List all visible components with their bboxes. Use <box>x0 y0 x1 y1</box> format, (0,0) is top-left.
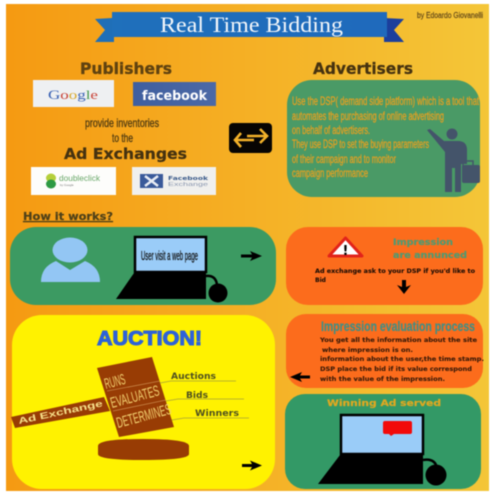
arrow <box>397 280 411 294</box>
text: provide inventories: provide inventories <box>85 116 159 130</box>
text: evaluation details: information about the user,the time stamp. <box>320 356 484 363</box>
heading: winning ad: Winning Ad served <box>327 399 441 409</box>
icon: user <box>41 238 100 282</box>
text: to the: to the <box>112 131 133 145</box>
gavel handle: Ad Exchange <box>17 398 104 426</box>
icon: warning: ! <box>343 244 348 259</box>
panel: advertisers <box>287 80 480 197</box>
panel: auction <box>11 315 275 489</box>
heading: publishers: Publishers <box>80 59 172 78</box>
icon: warning <box>329 238 362 259</box>
text: DSP description: campaign performance <box>292 166 368 180</box>
arrow <box>242 460 262 470</box>
gavel base <box>98 439 189 460</box>
icon: red ad bubble <box>383 421 412 436</box>
icon: laptop with mouse <box>116 237 228 302</box>
logo: doubleclick <box>31 167 116 195</box>
icon: businessman <box>427 128 480 192</box>
icon: two-way arrows <box>229 123 272 153</box>
text: DSP description: of their campaign and to monitor <box>292 152 396 166</box>
heading: auction: AUCTION! <box>97 328 202 350</box>
title: Real Time Bidding <box>160 12 343 37</box>
heading: ad exchanges: Ad Exchanges <box>64 145 187 163</box>
arrow <box>241 251 262 261</box>
heading: impression announced <box>393 238 467 261</box>
text: determines: DETERMINES <box>115 401 173 432</box>
text: runs: RUNS <box>103 371 127 393</box>
gavel head <box>97 357 174 437</box>
text: DSP description <box>292 94 479 180</box>
text: evaluation details <box>319 337 484 383</box>
label: winners: Winners <box>195 409 239 419</box>
text: ask DSP <box>315 268 475 284</box>
label: bids <box>166 391 244 401</box>
logo: google <box>33 80 114 107</box>
logo: google: Google <box>48 87 98 102</box>
logo: facebook: facebook <box>142 88 208 104</box>
label: auctions: Auctions <box>171 372 216 382</box>
panel: impression evaluation <box>286 314 484 388</box>
panel: winning ad <box>285 394 481 489</box>
heading: impression announced: Impression <box>393 238 453 248</box>
text: evaluates: EVALUATES <box>109 383 161 412</box>
heading: impression announced: are annunced <box>393 251 467 261</box>
heading: how it works: How it works? <box>23 210 113 223</box>
panel: user visits page <box>10 227 276 305</box>
icon: laptop with ad <box>318 415 446 486</box>
icon: laptop with mouse: User visit a web page <box>141 248 198 263</box>
text: ask DSP: Ad exchange ask to your DSP if you'd like to <box>315 268 475 275</box>
title ribbon <box>95 12 404 42</box>
text: evaluation details: where impression is on. <box>322 347 413 354</box>
logo: facebook exchange <box>132 167 216 195</box>
text: evaluation details: You get all the information about the site <box>319 337 477 344</box>
logo: facebook <box>133 82 216 106</box>
logo: doubleclick: by Google <box>60 183 74 187</box>
heading: advertisers: Advertisers <box>313 59 413 78</box>
logo: facebook exchange: Facebook <box>168 176 208 182</box>
text: evaluation details: DSP place the bid if its value correspond <box>320 366 472 373</box>
label: auctions <box>160 372 236 383</box>
panel: impression announced <box>286 227 483 305</box>
text: DSP description: on behalf of advertisers. <box>292 123 370 137</box>
text: ask DSP: Bid <box>315 277 326 284</box>
byline: by Edoardo Giovanelli <box>417 11 483 20</box>
label: bids: Bids <box>186 391 208 401</box>
label: winners <box>172 409 249 420</box>
text: evaluation details: with the value of the impression. <box>320 376 445 383</box>
gavel handle <box>11 397 110 428</box>
arrow <box>290 372 310 382</box>
logo: facebook exchange: Exchange <box>168 182 208 188</box>
logo: doubleclick: doubleclick <box>59 174 101 183</box>
